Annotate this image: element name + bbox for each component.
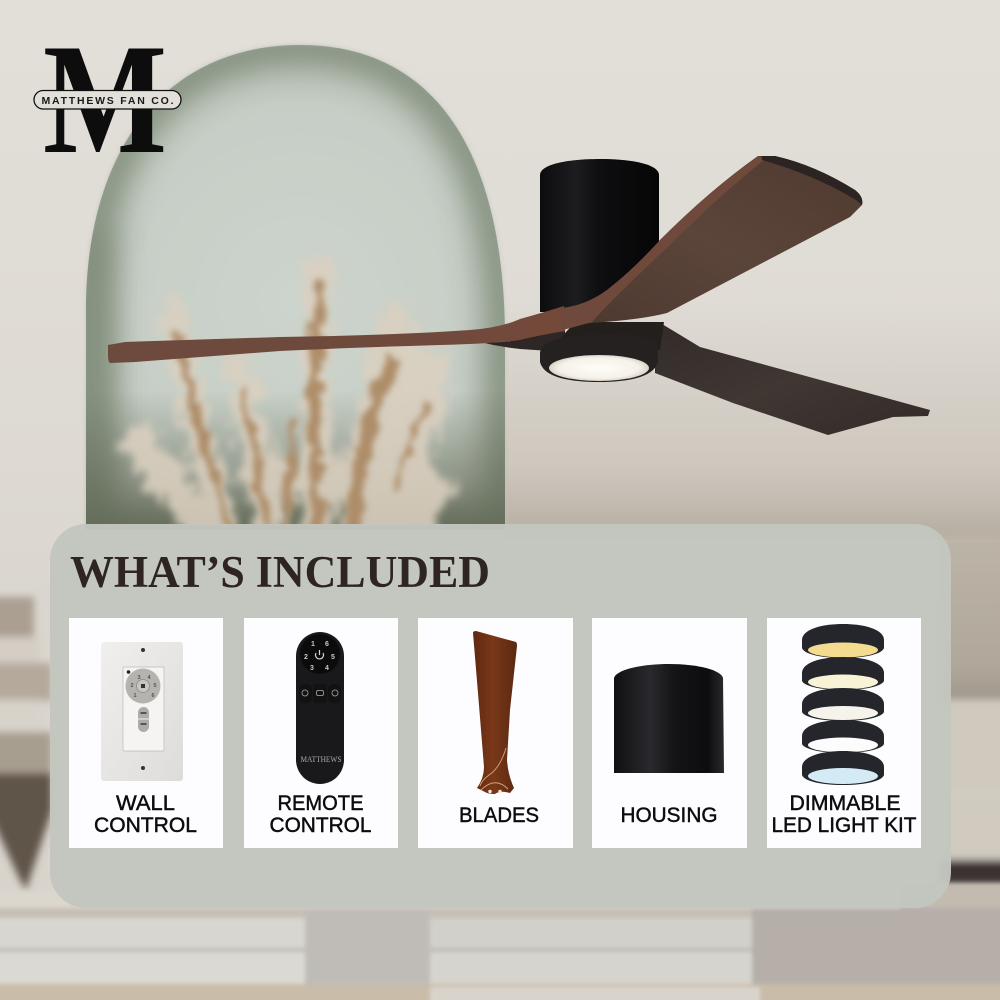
sofa and pillows, left side <box>0 597 52 890</box>
icon: wall control: 4 <box>147 675 151 681</box>
card: wall control <box>69 618 223 848</box>
floor <box>0 884 1000 1000</box>
icon: remote: 4 <box>325 665 329 672</box>
icon: wall control <box>101 642 183 781</box>
upper right blade <box>561 156 862 330</box>
card: housing <box>592 618 747 848</box>
label: remote control: REMOTE <box>278 792 364 815</box>
icon: wall control: 5 <box>153 683 157 689</box>
icon: remote: MATTHEWS <box>300 754 342 764</box>
icon: wall control: 3 <box>137 675 141 681</box>
label: housing: HOUSING <box>620 804 718 827</box>
icon: wall control: 6 <box>151 693 155 699</box>
fan housing <box>540 159 659 312</box>
background: arched alcove <box>80 45 506 530</box>
card: blades <box>418 618 573 848</box>
icon: wall control: 2 <box>130 683 134 689</box>
left blade underside <box>480 328 565 352</box>
hub neck <box>550 322 664 350</box>
pampas grass <box>140 265 435 545</box>
card: remote control <box>244 618 398 848</box>
logo: Matthews Fan Co. <box>34 12 181 187</box>
lower right blade <box>655 324 930 435</box>
heading: WHAT’S INCLUDED <box>70 547 490 597</box>
icon: remote: 3 <box>310 665 314 672</box>
logo name text: MATTHEWS FAN CO. <box>42 95 174 107</box>
label: LED light kit: LED LIGHT KIT <box>772 814 917 837</box>
label: dimmable: DIMMABLE <box>790 792 900 815</box>
panel: what's included <box>50 524 951 908</box>
sofa, right side <box>940 535 1000 884</box>
label: wall control line 2: CONTROL <box>94 814 197 837</box>
card: dimmable LED light kit <box>767 618 921 848</box>
icon: remote: 1 <box>311 641 315 648</box>
icon: housing cylinder <box>614 664 724 773</box>
icon: wall control: 1 <box>133 693 137 699</box>
icon: remote: 2 <box>304 654 308 661</box>
logo monogram M: M <box>43 12 167 187</box>
light kit ring <box>540 334 658 382</box>
icon: blade <box>473 631 517 794</box>
label: remote control line 2: CONTROL <box>270 814 372 837</box>
blade edge highlight <box>561 156 764 330</box>
icon: remote <box>296 632 344 784</box>
label: blades: BLADES <box>459 804 539 827</box>
logo name pill <box>34 90 181 109</box>
icon: remote: 5 <box>331 654 335 661</box>
label: wall control: WALL <box>116 792 175 815</box>
icon: LED discs <box>802 624 884 785</box>
ceiling fan <box>108 156 930 435</box>
icon: remote: 6 <box>325 641 329 648</box>
blade top rim <box>762 156 862 205</box>
left blade <box>108 306 565 363</box>
light kit lens <box>549 355 649 381</box>
